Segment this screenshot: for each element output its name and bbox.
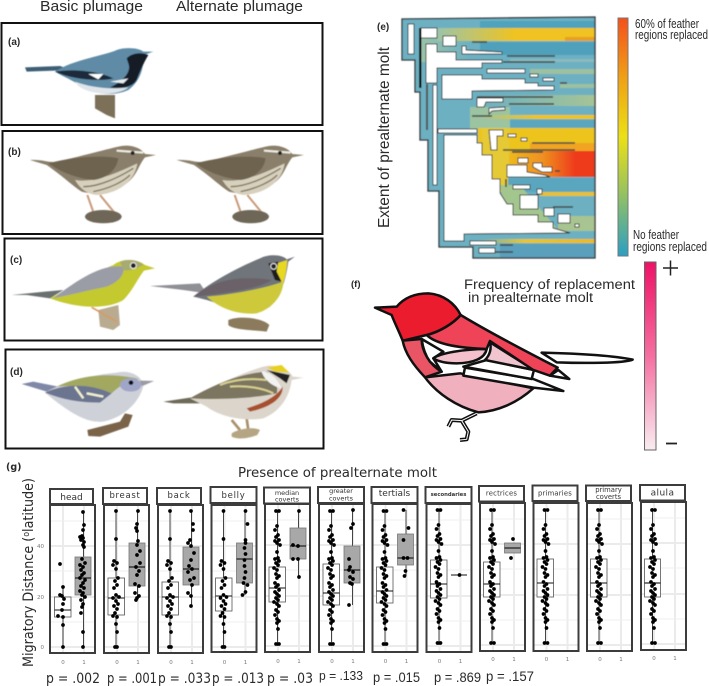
heading: frequency of replacement	[464, 277, 635, 305]
panel a: black-throated blue warbler	[2, 23, 322, 125]
facet: breast: breast	[109, 491, 141, 501]
illustration: bird feather regions	[375, 293, 633, 440]
panel a: black-throated blue warbler: (a)	[8, 37, 20, 48]
facet: belly: 1	[244, 660, 247, 666]
p values	[46, 668, 534, 686]
panel b: northern waterthrush	[2, 131, 322, 234]
facet: primary coverts: coverts	[596, 493, 622, 501]
legend label: minimum: No feather	[633, 228, 679, 242]
facet: tertials: 1	[405, 659, 408, 665]
facet: back: back	[168, 491, 190, 501]
label f: (f)	[351, 279, 360, 290]
facet: alula: 0	[652, 656, 656, 662]
facet: greater coverts: greater	[329, 487, 353, 495]
facet: back: 0	[169, 660, 173, 666]
facet: breast: 0	[115, 660, 119, 666]
facet: alula	[640, 485, 686, 662]
facet: belly	[210, 487, 256, 666]
axis title: migratory distance: o	[22, 532, 32, 537]
facet: primaries	[532, 486, 578, 663]
p values: p = .157	[486, 668, 534, 684]
facet: median coverts: 0	[276, 659, 280, 665]
panel d: chestnut-sided warbler	[6, 350, 324, 448]
facet: secondaries: secondaries	[431, 492, 466, 498]
legend minus sign	[666, 442, 677, 444]
facet: head	[50, 489, 95, 666]
facet: breast: 1	[136, 660, 140, 666]
facet: primary coverts: primary	[595, 486, 622, 494]
facet: tertials: 0	[384, 659, 388, 665]
facet: secondaries: 1	[459, 659, 462, 665]
facet: primary coverts: 1	[619, 657, 623, 663]
p values: p = .015	[373, 669, 420, 685]
facet: rectrices	[479, 486, 525, 663]
facet: head: 0	[61, 660, 65, 666]
panel c: Canada warbler: (c)	[10, 255, 22, 266]
facet: median coverts	[264, 488, 310, 665]
facet: back: 1	[190, 660, 194, 666]
chart: phylogenetic tree of molt extent	[400, 15, 600, 260]
panel c: Canada warbler	[4, 238, 322, 340]
facet: rectrices: rectrices	[486, 490, 517, 498]
facet: greater coverts: 0	[330, 659, 334, 665]
facet: greater coverts: 1	[351, 659, 355, 665]
facet: primaries: primaries	[538, 490, 572, 498]
facet: breast	[103, 488, 149, 666]
facet: tertials	[372, 487, 418, 665]
facet: head: 1	[82, 660, 86, 666]
y axis ticks: 20	[37, 595, 44, 601]
facet: primary coverts: 0	[598, 657, 602, 663]
axis title: migratory distance: latitude)	[21, 478, 37, 532]
y axis ticks	[37, 544, 44, 651]
label e: (e)	[377, 22, 389, 33]
panel b: northern waterthrush: (b)	[8, 147, 21, 158]
facet: greater coverts	[318, 487, 364, 665]
legend label: minimum	[633, 228, 707, 254]
axis title: extent of prealternate molt: Extent of prealternate molt	[376, 46, 393, 228]
facet: back	[157, 488, 203, 666]
facet: median coverts: median	[275, 489, 299, 497]
facet: tertials: tertials	[379, 489, 411, 499]
facet: secondaries: 0	[438, 659, 442, 665]
heading: frequency of replacement: in prealternate molt	[468, 290, 593, 305]
facet: alula: alula	[651, 488, 674, 498]
facet: rectrices: 0	[491, 657, 495, 663]
heading: frequency of replacement: Frequency of replacement	[464, 277, 635, 292]
axis title: migratory distance: Migratory Distance (	[21, 519, 37, 667]
legend plus sign	[663, 260, 678, 276]
facet: greater coverts: coverts	[329, 494, 354, 502]
facet: alula: 1	[673, 656, 677, 662]
y axis ticks: 0	[40, 645, 44, 651]
heading: presence of prealternate molt: Presence of prealternate molt	[238, 466, 437, 481]
facet: secondaries	[426, 487, 472, 665]
facet: belly: 0	[223, 660, 227, 666]
facet: median coverts: 1	[297, 659, 301, 665]
p values: p = .869	[434, 669, 481, 685]
facet: primary coverts	[586, 486, 632, 663]
panel d: chestnut-sided warbler: (d)	[10, 367, 23, 378]
p values: p = .133	[319, 668, 363, 683]
facet: median coverts: coverts	[275, 496, 300, 504]
legend: molt extent colour bar	[618, 18, 628, 256]
facet: belly: belly	[222, 491, 245, 501]
legend: replacement frequency colour bar	[644, 262, 656, 450]
label g: (g)	[6, 462, 21, 473]
y axis ticks: 40	[37, 544, 44, 550]
facet: rectrices: 1	[512, 657, 516, 663]
facet: primaries: 0	[545, 657, 549, 663]
facet: head: head	[60, 493, 83, 503]
legend label: maximum	[635, 17, 708, 42]
facet: primaries: 1	[566, 657, 569, 663]
